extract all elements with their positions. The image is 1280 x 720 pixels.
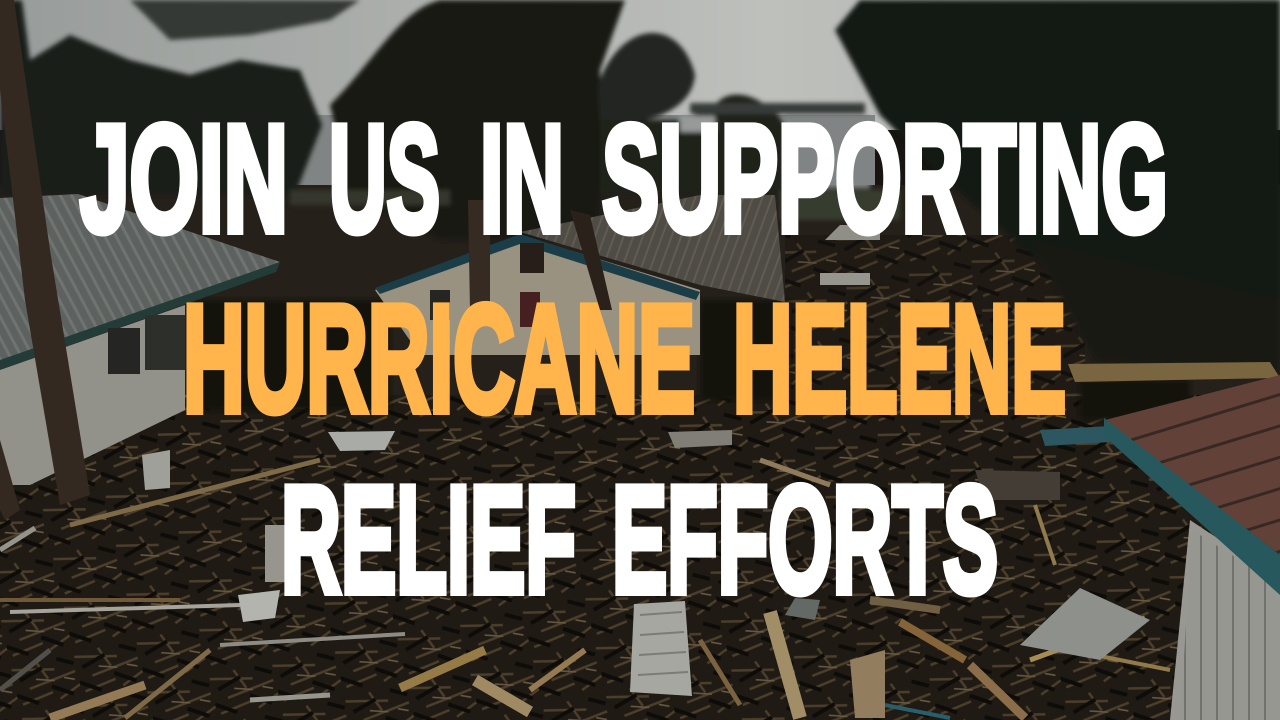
- headline line 1: JOIN: [80, 94, 288, 264]
- white door panel: [630, 601, 692, 696]
- tree trunks: [0, 0, 90, 505]
- pipe on right: [1068, 362, 1280, 382]
- headline line 1: US: [329, 94, 440, 264]
- debris pieces: [0, 460, 1170, 718]
- right house: [1104, 375, 1280, 720]
- debris ground: [0, 185, 1280, 720]
- headline line 3: RELIEF: [281, 455, 576, 625]
- headline: [80, 94, 1168, 625]
- vegetation: [0, 0, 1280, 420]
- sky: [0, 0, 1280, 130]
- small pale debris: [1020, 588, 1150, 660]
- shoreline strip: [290, 190, 450, 205]
- centre palms: [330, 0, 625, 240]
- left house: [0, 194, 280, 485]
- right trees: [835, 0, 1280, 375]
- headline line 1: IN: [480, 94, 564, 264]
- headline line 2: HURRICANE: [183, 274, 695, 444]
- centre house: [375, 195, 785, 355]
- water: [285, 115, 875, 190]
- left trees: [0, 0, 322, 195]
- headline line 1: [80, 94, 1168, 264]
- dark shadow around houses: [700, 300, 790, 400]
